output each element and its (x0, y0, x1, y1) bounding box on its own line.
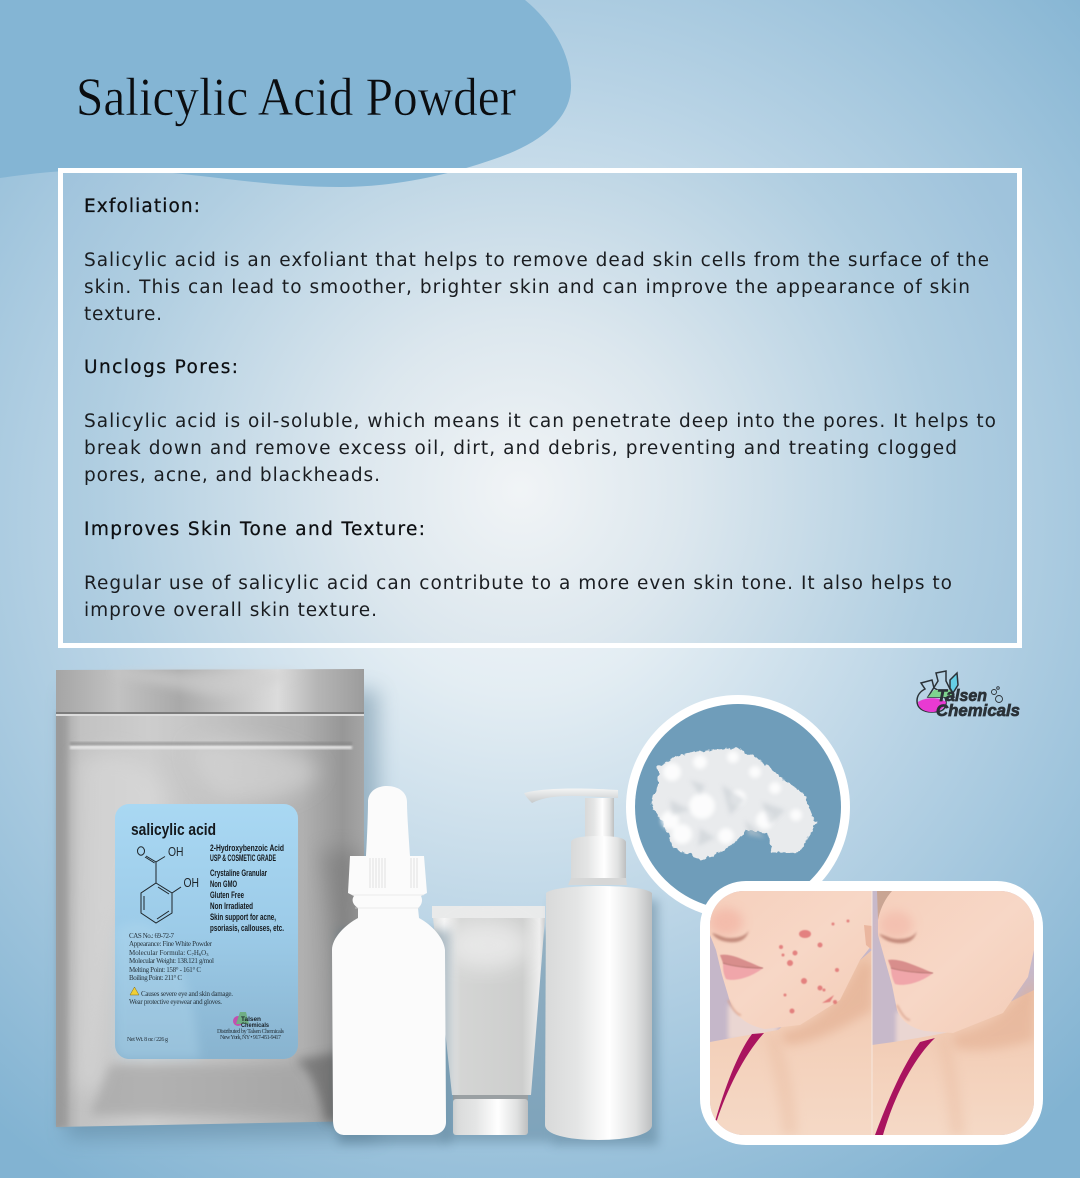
label warning: Wear protective eyewear and gloves. (129, 998, 222, 1006)
logo flasks (917, 671, 958, 712)
label small logo: Talsen (241, 1017, 261, 1023)
photos (709, 891, 1034, 1135)
label claims: Non GMO (210, 879, 237, 889)
label distributor (127, 1029, 285, 1043)
label claims: USP & COSMETIC GRADE (210, 853, 276, 863)
product: foil pouch (56, 669, 378, 1138)
label small logo (233, 1012, 270, 1029)
panel: benefits text (60, 170, 1020, 646)
before and after photo (700, 881, 1043, 1145)
logo wordmark line 2: Chemicals (936, 701, 1020, 720)
label sheen (115, 922, 200, 1059)
photo frame (700, 881, 1043, 1145)
before photo (709, 891, 872, 1135)
tube crimp (432, 906, 545, 918)
text block: exfoliation: skin. This can lead to smoother, brighter skin and can improve the appearance of skin (84, 277, 970, 298)
pump body (545, 886, 652, 1140)
label specifications: Appearance: Fine White Powder (129, 940, 213, 948)
pouch top seal (56, 669, 364, 712)
text block: unclogs pores (84, 411, 996, 486)
label specifications: O (201, 949, 206, 957)
molecule diagram: OH (168, 845, 184, 859)
tube band (453, 1095, 528, 1100)
text block: exfoliation (84, 250, 989, 325)
text block: improves skin tone (84, 573, 952, 621)
powder circle (626, 695, 850, 919)
heading: exfoliation: Exfoliation: (84, 196, 200, 217)
label claims: psoriasis, callouses, etc. (210, 923, 284, 933)
label title: salicylic acid (131, 820, 216, 839)
pump shadow (552, 900, 658, 1145)
dropper shadow (338, 930, 450, 1144)
dropper cap ridges (352, 858, 424, 908)
pouch sheen (56, 712, 362, 1127)
pump collar (571, 836, 626, 878)
label claims (210, 843, 284, 933)
label specifications: Molecular Formula: C (129, 949, 192, 957)
label claims: Gluten Free (210, 890, 244, 900)
pump stem (585, 798, 614, 837)
tube body (433, 918, 545, 1095)
pump nozzle (524, 788, 618, 803)
icon: warning (130, 987, 139, 995)
pouch label (115, 804, 298, 1059)
tube shadow (445, 930, 553, 1142)
seal sheen (110, 672, 300, 695)
text block: improves skin tone: improve overall skin texture. (84, 600, 377, 621)
text block: exfoliation: Salicylic acid is an exfoliant that helps to remove dead skin cells from the surface of the (84, 250, 989, 271)
logo wordmark: Talsen (937, 686, 987, 705)
text panel fill (60, 170, 1020, 646)
molecule diagram: OH (184, 876, 199, 890)
label warning (129, 990, 233, 1006)
pump shoulder (568, 878, 627, 885)
label specifications: CAS No.: 69-72-7 (129, 932, 174, 940)
label specifications: H (194, 949, 199, 957)
label specifications: 3 (206, 952, 209, 957)
text block: unclogs pores: break down and remove excess oil, dirt, and debris, preventing and treating clogged (84, 438, 957, 459)
panel border (60, 170, 1020, 646)
label claims: 2-Hydroxybenzoic Acid (210, 843, 284, 853)
label claims: Non Irradiated (210, 901, 253, 911)
label small logo: Chemicals (241, 1023, 270, 1029)
pouch shadow (66, 690, 378, 1138)
dropper body (332, 786, 446, 1135)
label specifications: 7 (192, 952, 195, 957)
label specifications (129, 932, 214, 982)
pouch body (56, 712, 364, 1127)
label specifications: Boiling Point: 211° C (129, 974, 182, 982)
product: tube (432, 906, 553, 1142)
text block: exfoliation: texture. (84, 304, 162, 325)
product: pump bottle (524, 788, 658, 1145)
product: dropper bottle (332, 786, 450, 1144)
header blob (0, 0, 571, 187)
text block: improves skin tone: Regular use of salicylic acid can contribute to a more even skin tone. It also helps to (84, 573, 952, 594)
divider (872, 891, 873, 1135)
label distributor: New York, NY • 917-451-9417 (220, 1035, 281, 1041)
label claims: Skin support for acne, (210, 912, 276, 922)
label claims: Crystaline Granular (210, 868, 267, 878)
label specifications: Molecular Weight: 138.121 g/mol (129, 957, 214, 965)
after photo (872, 891, 1034, 1135)
acne spots (779, 920, 850, 1014)
label specifications: 6 (199, 952, 202, 957)
heading: unclogs pores: Unclogs Pores: (84, 357, 238, 378)
text block: unclogs pores: Salicylic acid is oil-soluble, which means it can penetrate deep into the pores. It helps to (84, 411, 996, 432)
heading: improves skin tone: Improves Skin Tone and Texture: (84, 519, 425, 540)
label distributor: Net Wt. 8 oz / 226 g (127, 1037, 168, 1043)
circle frame (626, 695, 850, 919)
powder pile (650, 748, 817, 860)
tube soft highlight (446, 921, 530, 969)
text block: unclogs pores: pores, acne, and blackheads. (84, 465, 380, 486)
zip lines (56, 712, 364, 749)
logo bubbles (992, 687, 1002, 702)
label distributor: Distributed by Talsen Chemicals (217, 1029, 285, 1035)
circle fill (635, 704, 841, 910)
label specifications: Melting Point: 158° - 161° C (129, 966, 201, 974)
logo (917, 671, 1020, 720)
title: Salicylic Acid Powder (76, 67, 516, 127)
molecule diagram (138, 845, 199, 923)
label warning: Causes severe eye and skin damage. (141, 990, 233, 998)
tube cap (453, 1099, 528, 1135)
